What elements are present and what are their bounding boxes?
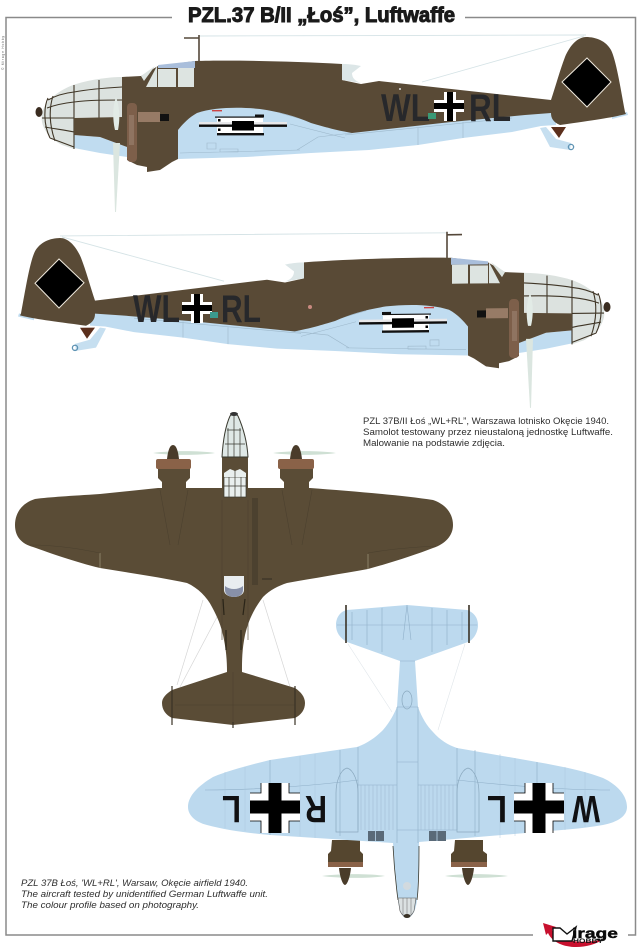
green patch <box>210 312 218 318</box>
underwing code letters: L <box>222 787 241 829</box>
wing, fuselage and tail <box>188 605 627 918</box>
caption: English: The aircraft tested by unidentified German Luftwaffe unit. <box>21 888 268 899</box>
underwing code letters: R <box>305 787 327 829</box>
logo: Mirage Hobby: irage <box>572 925 618 941</box>
underwing code letters <box>222 787 600 829</box>
panel lines <box>205 605 610 843</box>
bomb bay hatching <box>361 785 453 830</box>
wing walkway strip <box>252 498 258 585</box>
right cross <box>514 783 564 833</box>
wing, fuselage and tail <box>15 457 453 725</box>
bottom view aircraft <box>188 605 627 918</box>
fuselage code RL: RL <box>221 288 261 331</box>
tail end plates <box>172 686 295 728</box>
underwing code letters: L <box>487 787 507 829</box>
fuselage code WL: WL <box>133 288 180 331</box>
propellers <box>153 451 336 455</box>
cockpit canopy <box>224 477 246 497</box>
fuselage nose outline <box>393 846 419 900</box>
caption: Polish <box>363 416 613 449</box>
spinners <box>339 868 474 885</box>
logo: Mirage Hobby <box>543 923 618 947</box>
left cross <box>250 783 300 833</box>
caption: Polish: Samolot testowany przez nieustaloną jednostkę Luftwaffe. <box>363 427 613 438</box>
title: PZL.37 B/II „Łoś”, Luftwaffe <box>188 4 455 27</box>
side profile: right-facing aircraft <box>18 230 610 413</box>
top view aircraft <box>15 412 453 728</box>
copyright note: © Mirage Hobby <box>1 36 5 70</box>
logo: Mirage Hobby: HOBBY <box>573 939 603 945</box>
spinners <box>167 445 302 459</box>
underwing code letters: W <box>572 787 600 829</box>
rear gunner canopy <box>224 576 244 597</box>
fuselage code RL: RL <box>469 87 511 130</box>
caption: English <box>21 877 268 910</box>
caption: English: The colour profile based on photography. <box>21 899 199 910</box>
M outline <box>553 927 576 941</box>
green patch <box>428 113 436 119</box>
bracing wires <box>177 600 290 687</box>
tail end plates <box>346 605 469 643</box>
bracing wires <box>348 644 465 730</box>
caption: Polish: Malowanie na podstawie zdjęcia. <box>363 438 505 449</box>
national cross <box>434 92 464 121</box>
caption: English: PZL 37B Łoś, 'WL+RL', Warsaw, Okęcie airfield 1940. <box>21 877 248 888</box>
national cross <box>182 294 212 323</box>
grey hatches <box>368 831 384 841</box>
swoosh <box>543 923 604 947</box>
nose glazing <box>398 898 416 917</box>
side profile: left-facing aircraft <box>36 35 628 212</box>
engine nacelles <box>158 461 313 490</box>
nose glazing <box>222 413 248 457</box>
caption: Polish: PZL 37B/II Łoś „WL+RL”, Warszawa lotnisko Okęcie 1940. <box>363 416 609 427</box>
propellers <box>322 874 508 878</box>
fuselage code WL: WL <box>381 87 430 130</box>
engine nacelles <box>328 840 487 867</box>
